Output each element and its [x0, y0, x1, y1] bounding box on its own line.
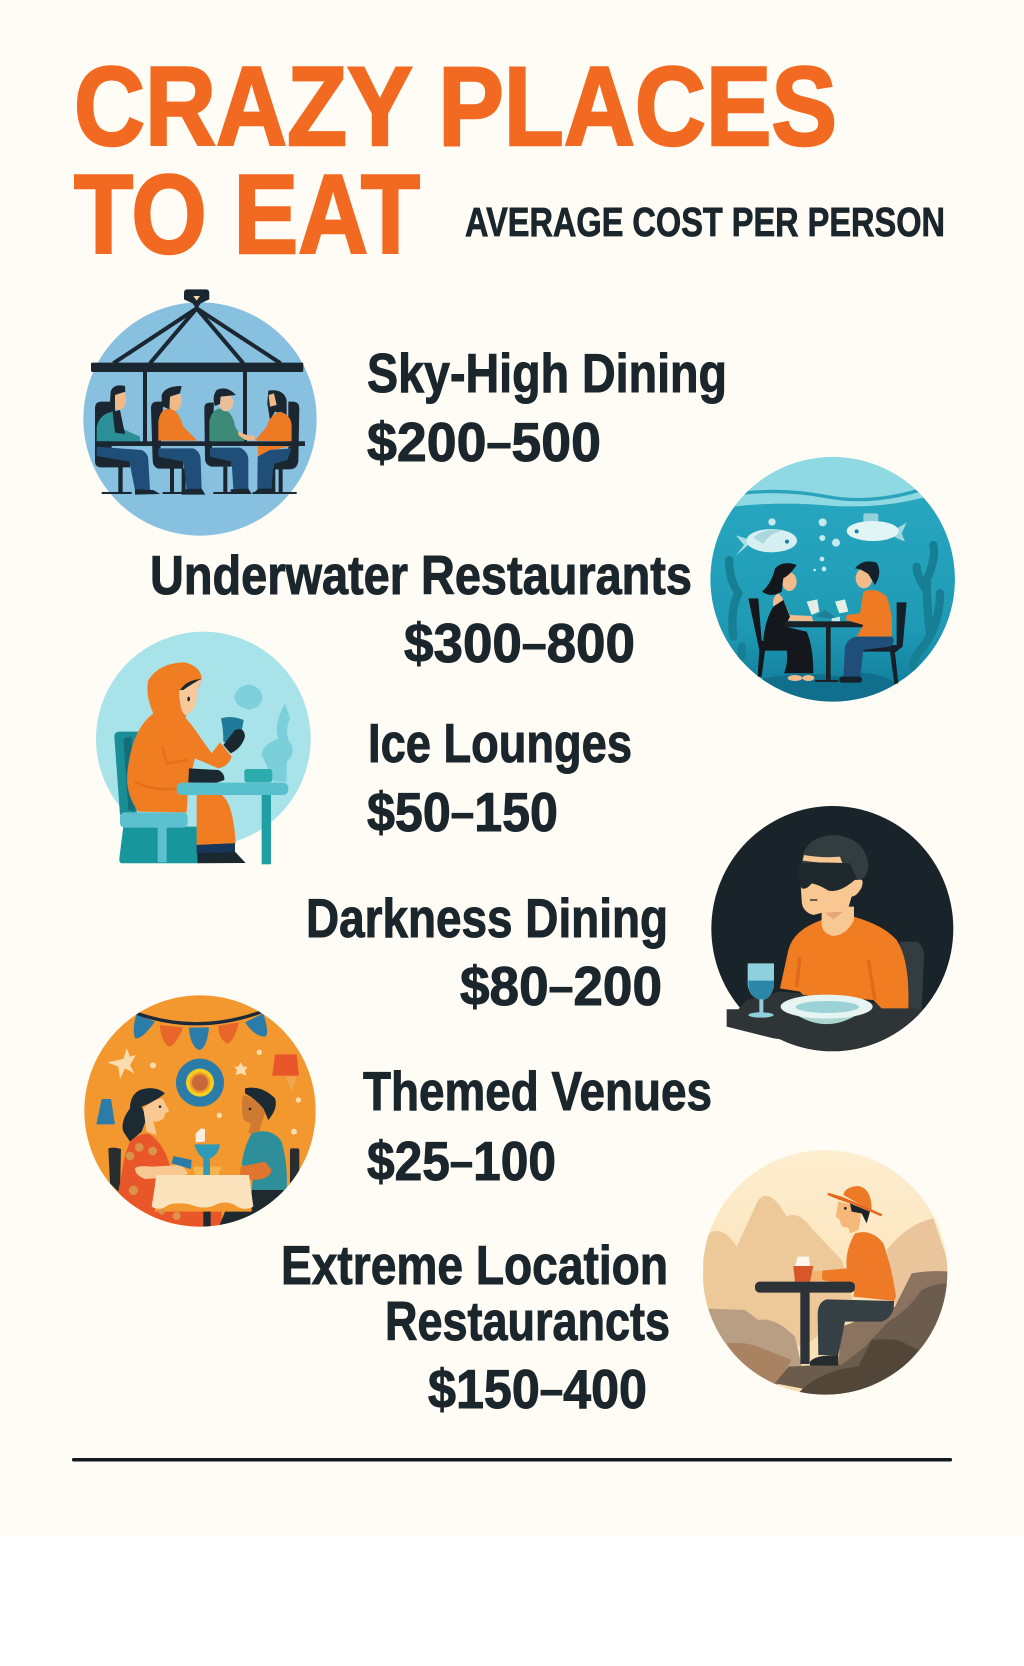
item: themed venues: 100: [473, 1130, 556, 1192]
item: ice lounges: Ice Lounges: [368, 712, 632, 774]
item: themed venues: $25: [367, 1130, 459, 1192]
bubbles: [768, 518, 840, 571]
item: darkness dining: 200: [573, 955, 662, 1017]
footer rule: [72, 1458, 952, 1462]
icon: sky-high dining: [83, 289, 317, 536]
item: themed venues: –: [450, 1135, 473, 1187]
seaweed: [729, 545, 940, 667]
chairs: [108, 1148, 121, 1193]
item: extreme location restaurants: $150: [428, 1358, 550, 1420]
chair: [114, 732, 198, 863]
item: darkness dining: $80: [460, 955, 552, 1017]
item: ice lounges: $50: [367, 781, 459, 843]
item: darkness dining: [306, 887, 668, 1017]
item: extreme location restaurants: 400: [563, 1358, 647, 1420]
item: extreme location restaurants: Restaurancts: [385, 1290, 670, 1352]
woman: [748, 563, 814, 681]
decorations: [96, 1048, 301, 1135]
plate: [781, 995, 873, 1024]
title: [74, 44, 837, 277]
item: sky-high dining: Sky-High Dining: [367, 342, 727, 404]
bunting: [134, 1012, 267, 1050]
item: extreme location restaurants: Extreme Location: [281, 1234, 668, 1296]
person: [780, 835, 908, 1008]
item: underwater restaurants: Underwater Restaurants: [150, 544, 692, 606]
item: sky-high dining: [367, 342, 727, 473]
table: [177, 769, 288, 864]
man: [839, 561, 907, 684]
item: sky-high dining: $200: [367, 411, 489, 473]
item: darkness dining: Darkness Dining: [306, 887, 668, 949]
item: extreme location restaurants: –: [540, 1363, 563, 1415]
item: ice lounges: –: [451, 786, 474, 838]
fish left: [736, 529, 797, 555]
man: [218, 1088, 288, 1228]
item: sky-high dining: –: [486, 416, 511, 468]
title: CRAZY PLACES: [74, 44, 837, 169]
fish right: [847, 513, 907, 542]
title: TO EAT: [74, 152, 420, 277]
item: underwater restaurants: –: [522, 617, 547, 669]
person in parka: [127, 662, 246, 863]
item: underwater restaurants: [150, 544, 692, 674]
woman: [118, 1088, 222, 1230]
item: ice lounges: 150: [474, 781, 558, 843]
item: themed venues: [363, 1060, 712, 1192]
table: [755, 1282, 855, 1364]
item: underwater restaurants: $300: [404, 612, 526, 674]
person: [810, 1186, 896, 1366]
person 1: [95, 385, 160, 495]
icon: extreme location: [702, 1150, 952, 1400]
table: [785, 599, 867, 682]
item: ice lounges: [367, 712, 632, 843]
icon: ice lounge: [96, 632, 311, 864]
item: themed venues: Themed Venues: [363, 1060, 712, 1122]
item: extreme location restaurants: [281, 1234, 670, 1420]
icon: themed venue: [84, 995, 316, 1230]
icon: underwater restaurant: [710, 457, 955, 702]
item: darkness dining: –: [549, 960, 573, 1012]
item: underwater restaurants: 800: [547, 612, 635, 674]
icon: darkness dining: [711, 806, 953, 1051]
item: sky-high dining: 500: [511, 411, 601, 473]
wine glass: [748, 963, 774, 1018]
person 2: [151, 386, 205, 495]
person 3: [204, 388, 252, 494]
glass and table: [152, 1128, 253, 1228]
person 4: [253, 390, 299, 494]
cup: [793, 1257, 813, 1282]
